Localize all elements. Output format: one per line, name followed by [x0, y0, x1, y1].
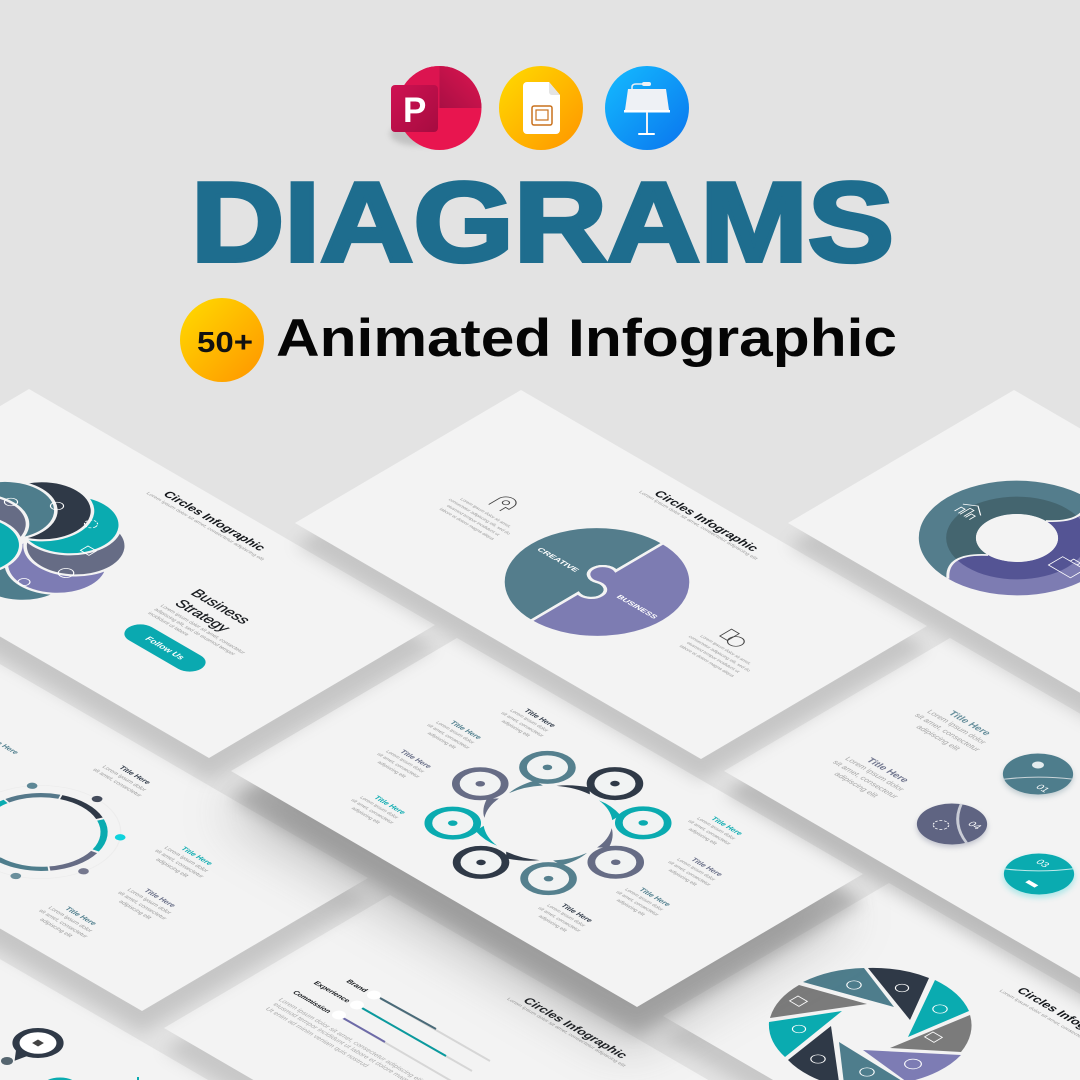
- text: title second: sit amet, consectetur: [830, 759, 901, 800]
- text: title 6: [659, 851, 728, 891]
- badge: 50+: 50+: [197, 327, 253, 359]
- icon: Google Slides: [499, 66, 583, 150]
- text: title 8: adipiscing elit: [536, 914, 569, 933]
- text: steel title: Lorem ipsum dolor: [46, 906, 93, 933]
- text: title 3: adipiscing elit: [375, 760, 408, 779]
- text: title 4: sit amet, consectetur: [349, 798, 395, 825]
- text: left note: consectetur adipiscing elit, sed do: [447, 498, 512, 535]
- chart: iris of nine blades: [769, 968, 972, 1080]
- text: right note: eiusmod tempor incididunt ut: [685, 641, 742, 674]
- text: dark title: Title Here: [117, 764, 153, 786]
- slider: Brand: Brand: [344, 978, 370, 993]
- ring: steel bottom: [524, 853, 587, 893]
- petal icons: [2, 497, 100, 587]
- subheading: Lorem ipsum dolor sit amet, consectetur adipiscing elit: [505, 997, 628, 1068]
- lorem paragraph: Ut enim ad minim veniam quis nostrud: [263, 1007, 370, 1069]
- half: creative: [464, 504, 677, 629]
- text: title 3: Lorem ipsum dolor: [384, 750, 426, 774]
- text: title top: [903, 701, 1002, 758]
- text: dark title: [91, 758, 160, 798]
- text: title 5: Title Here: [709, 815, 745, 837]
- ring: teal left: [428, 809, 497, 846]
- subheading: Lorem ipsum dolor sit amet, consectetur adipiscing elit: [637, 490, 760, 561]
- slider: Commission: Commission: [291, 989, 334, 1014]
- text: steel title: [30, 899, 106, 943]
- panel: eight rings slide, centre: [221, 638, 863, 1049]
- half: steel: [918, 480, 1080, 578]
- teal tick fragment: [137, 1077, 139, 1080]
- panel: numbered discs slide, right: [724, 638, 1080, 1029]
- business strategy heading: Business: [186, 587, 255, 627]
- text: right note: [675, 631, 758, 680]
- text: teal title: Lorem ipsum dolor: [162, 846, 209, 873]
- text: title second: [821, 748, 920, 805]
- panel: ring segments slide, left: [0, 642, 368, 1033]
- text: title second: Title Here: [863, 757, 912, 785]
- teal arc fragment: [42, 1079, 78, 1080]
- text: title 1: Lorem ipsum dolor: [508, 709, 550, 733]
- icon: dark speech ring: [0, 1025, 69, 1068]
- panel: iris slide, bottom right: [663, 883, 1080, 1080]
- text: title 1: adipiscing elit: [499, 719, 532, 738]
- slider: Experience: [311, 980, 472, 1071]
- text: title 5: Lorem ipsum dolor: [695, 817, 737, 841]
- chart: S split circle: [464, 504, 730, 660]
- heading: Circles Infographic: [520, 996, 631, 1060]
- subtitle: Animated Infographic: [276, 309, 897, 368]
- icon: bar chart: [953, 501, 987, 521]
- label 03: 03: [1033, 858, 1052, 869]
- chart: flower of nine petals: [0, 456, 169, 625]
- text: dark title: Lorem ipsum dolor: [100, 765, 147, 792]
- lorem paragraph: adipiscing elit, sed do eiusmod tempor: [152, 608, 237, 657]
- text: slate title: adipiscing elit: [117, 900, 153, 921]
- text: title 3: sit amet, consectetur: [375, 752, 421, 779]
- panel: puzzle circle slide, top centre: [295, 390, 927, 781]
- text: title 6: Lorem ipsum dolor: [675, 858, 717, 882]
- text: right note: Lorem ipsum dolor sit amet,: [699, 634, 753, 665]
- chart: eight connected rings: [379, 724, 717, 922]
- heading: Circles Infographic: [651, 489, 762, 553]
- disc: 03: [989, 845, 1080, 903]
- icon: bulb: [1030, 760, 1046, 770]
- half: business: [517, 535, 730, 660]
- text: title 4: [342, 789, 411, 829]
- slider: Experience: Experience: [311, 980, 353, 1004]
- text: left note: [435, 494, 518, 543]
- ring: dark lower left: [447, 834, 540, 888]
- dot marker: [1, 1057, 13, 1065]
- text: steel title: sit amet, consectetur: [37, 909, 89, 939]
- text: title 4: Lorem ipsum dolor: [358, 796, 400, 820]
- text: title 5: sit amet, consectetur: [686, 819, 732, 846]
- ring: teal right: [599, 800, 668, 837]
- text: title 2: adipiscing elit: [425, 731, 458, 750]
- text: right note: consectetur adipiscing elit, sed do: [687, 635, 752, 672]
- text: left note: eiusmod tempor incididunt ut: [445, 504, 502, 537]
- text: title 2: [418, 714, 487, 754]
- app icons row: [390, 66, 689, 150]
- text: title top: Lorem ipsum dolor: [925, 708, 989, 746]
- icon: gears: [930, 819, 952, 831]
- icon: head gear: [489, 494, 520, 513]
- slider: Brand: [344, 978, 490, 1061]
- panel: speech bubble slide, bottom left: [0, 930, 356, 1080]
- text: teal title: sit amet, consectetur: [153, 849, 205, 879]
- disc: 04: [902, 795, 1002, 853]
- text: title 6: sit amet, consectetur: [666, 860, 712, 887]
- text: title 1: [492, 702, 561, 742]
- text: slate title: sit amet, consectetur: [116, 891, 168, 921]
- panel: slider slide, bottom centre: [164, 895, 796, 1080]
- panel: flower slide, top left: [0, 389, 435, 780]
- half: purple: [948, 516, 1080, 596]
- text: title 3: Title Here: [398, 748, 434, 770]
- text: title 8: [529, 897, 598, 937]
- text: slate title: Lorem ipsum dolor: [125, 888, 172, 915]
- label: business: BUSINESS: [614, 593, 660, 620]
- text: title 5: [679, 810, 748, 850]
- ring: steel top: [509, 753, 572, 793]
- text: title 8: Title Here: [559, 902, 595, 924]
- text: title 6: adipiscing elit: [666, 868, 699, 887]
- icon: briefcase: [1048, 555, 1080, 578]
- text: title 7: sit amet, consectetur: [614, 890, 660, 917]
- text: steel title: adipiscing elit: [38, 918, 74, 939]
- icon: Keynote: [605, 66, 689, 150]
- text: left note: labore et dolore magna aliqua: [438, 507, 496, 541]
- text: title 5: adipiscing elit: [686, 827, 719, 846]
- text: slate title: [109, 881, 185, 925]
- text: title top: adipiscing elit: [914, 724, 963, 752]
- chart: two-part donut: [918, 480, 1080, 596]
- subheading: Lorem ipsum dolor sit amet, consectetur adipiscing elit: [144, 491, 266, 562]
- label 01: 01: [1033, 783, 1052, 794]
- text: title top: sit amet, consectetur: [912, 712, 983, 753]
- icon: money: [717, 629, 750, 648]
- text: teal title: adipiscing elit: [154, 858, 190, 879]
- label: creative: CREATIVE: [535, 546, 582, 573]
- disc: 01: [988, 745, 1080, 803]
- text: title 8: Lorem ipsum dolor: [545, 904, 587, 928]
- text: teal title: [146, 839, 222, 883]
- text: title top: Title Here: [945, 710, 994, 738]
- lorem paragraph: incididunt ut labore: [146, 611, 190, 637]
- text: title 8: sit amet, consectetur: [536, 906, 582, 933]
- button: Follow Us: [118, 620, 212, 676]
- lorem paragraph: Lorem ipsum dolor sit amet, consectetur: [158, 604, 246, 655]
- badge: 50+: [180, 298, 264, 382]
- icon: PowerPoint: P: [403, 91, 426, 130]
- text: teal title: Title Here: [179, 845, 215, 867]
- title: DIAGRAMS: [191, 159, 894, 285]
- text: title 3: [368, 743, 437, 783]
- text: title 2: sit amet, consectetur: [425, 723, 471, 750]
- text: title 2: Lorem ipsum dolor: [434, 721, 476, 745]
- business strategy heading: Strategy: [170, 597, 234, 635]
- ring: dark: [556, 758, 649, 812]
- icon: hand: [1025, 880, 1038, 888]
- text: title 4: adipiscing elit: [349, 806, 382, 825]
- ring: slate: [567, 828, 660, 882]
- text: title 1: sit amet, consectetur: [499, 711, 545, 738]
- text: title second: adipiscing elit: [832, 771, 881, 799]
- text: title 1: Title Here: [522, 707, 558, 729]
- text: right note: labore et dolore magna aliqua: [678, 644, 736, 678]
- heading: Circles Infographic: [160, 489, 269, 553]
- text: title 2: Title Here: [448, 719, 484, 741]
- text: title 6: Title Here: [689, 856, 725, 878]
- text: title 7: adipiscing elit: [614, 898, 647, 917]
- text: title 4: Title Here: [372, 794, 408, 816]
- label 04: 04: [965, 820, 984, 832]
- panel: donut slide, top right: [788, 390, 1080, 720]
- text: title 7: [607, 881, 676, 921]
- text: title 7: Title Here: [637, 886, 673, 908]
- text: title 7: Lorem ipsum dolor: [623, 888, 665, 912]
- text: slate title: Title Here: [142, 887, 178, 909]
- text: title second: Lorem ipsum dolor: [843, 755, 907, 793]
- ring: slate upper left: [436, 764, 529, 818]
- text: dark title: sit amet, consectetur: [91, 768, 143, 798]
- button: Follow Us: Follow Us: [143, 635, 187, 661]
- text: steel title: Title Here: [63, 905, 99, 927]
- business strategy heading: [170, 587, 255, 637]
- icon: PowerPoint: [390, 66, 482, 150]
- slider: Commission: [291, 989, 453, 1080]
- chart: segmented ring: [0, 759, 167, 905]
- text: left note: Lorem ipsum dolor sit amet,: [459, 497, 513, 528]
